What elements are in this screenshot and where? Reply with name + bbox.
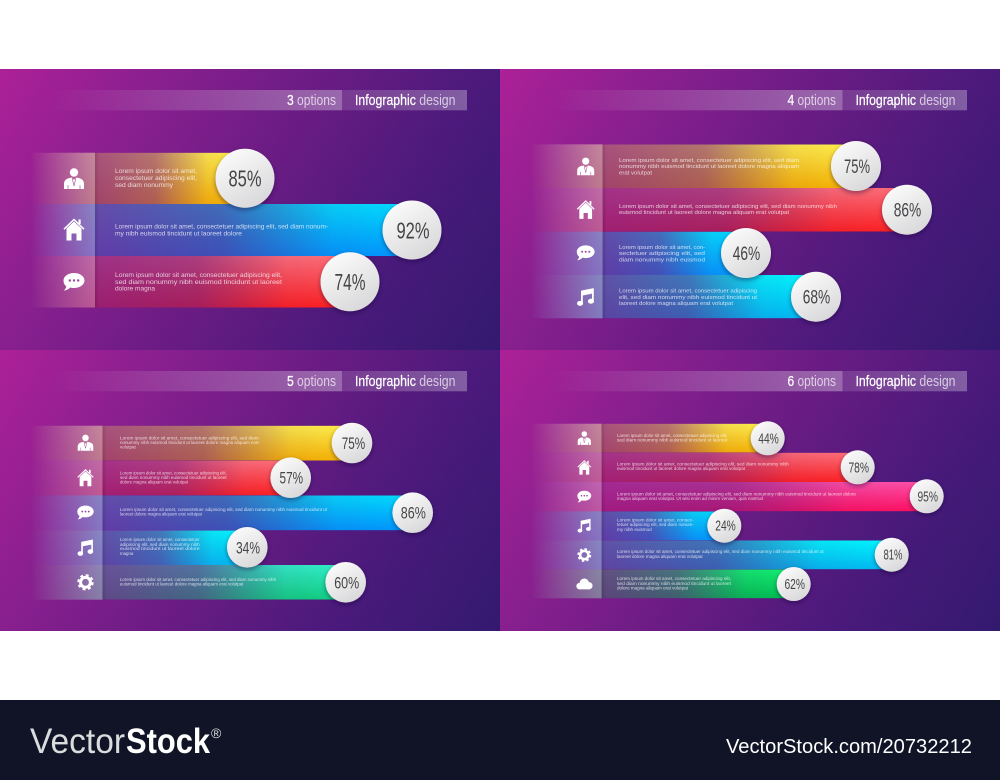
header: Infographic design: Infographic design (355, 92, 456, 109)
badge: 44%: 44% (758, 431, 779, 447)
badge: 75% (332, 423, 372, 463)
icon: person (578, 431, 591, 445)
icon: person (577, 158, 594, 175)
bar: red: euismod tincidunt ut laoreet dolore magna aliquam erat volutpat (619, 210, 790, 216)
header: 3 options: 3 options (287, 92, 336, 109)
footer logo: Stock (126, 722, 210, 761)
badge: 95% (910, 479, 944, 513)
bar: green: sed diam nonummy nibh euismod tincidunt ut laoreet (617, 581, 732, 586)
bar: red (95, 256, 350, 308)
icon: cloud (576, 579, 593, 589)
panel: 3 options (0, 69, 500, 350)
badge: 46%: 46% (733, 243, 760, 265)
icon: home (64, 220, 84, 240)
badge: 60%: 60% (334, 573, 359, 592)
bar: cyan: euismod tincidunt ut laoreet dolore (120, 546, 200, 551)
bar: yellow: Lorem ipsum dolor sit amet, consectetuer adipiscing elit, sed diam (120, 436, 259, 440)
bar: green: dolore magna aliquam erat volutpat (617, 586, 689, 590)
badge: 68%: 68% (803, 286, 830, 308)
icon: music (577, 288, 594, 306)
badge: 68% (791, 272, 841, 322)
bar: red: sed diam nonummy nibh euismod tincidunt ut laoreet (120, 475, 228, 480)
icon: chat (64, 273, 84, 291)
bar: cyan (603, 275, 816, 318)
header: 6 options: 6 options (788, 373, 836, 390)
bar: red: Lorem ipsum dolor sit amet, consectetuer adipiscing elit, (115, 272, 282, 279)
badge: 95%: 95% (917, 489, 938, 505)
badge: 74%: 74% (334, 269, 366, 295)
footer logo (30, 722, 210, 761)
bar: yellow: consectetuer adipiscing elit, (115, 175, 197, 182)
badge: 75% (831, 141, 881, 191)
icon: home (578, 461, 591, 475)
bar: yellow: volutpat (120, 444, 137, 450)
header: 4 options (550, 90, 842, 110)
header: 4 options: 4 options (788, 92, 836, 109)
bar: yellow: nonummy nibh euismod tincidunt ut laoreet dolore magna aliquam erat (120, 440, 260, 445)
bar: red: dolore magna aliquam erat volutpat (120, 480, 189, 484)
bar: pink: magna aliquam erat volutpat. Ut wisi enim ad minim veniam, quis nostrud (617, 496, 764, 501)
bar: blue: tetuer adipiscing elit, sed diam nonum- (617, 522, 694, 527)
bar: red: Lorem ipsum dolor sit amet, consectetuer adipiscing elit, sed diam nonummy nibh (619, 204, 837, 210)
header: 5 options: 5 options (287, 373, 336, 390)
bar: yellow (95, 153, 245, 204)
badge: 85% (216, 149, 274, 208)
footer band (0, 700, 1000, 780)
panel: 6 options (500, 350, 1000, 631)
header: 6 options (550, 371, 842, 391)
icon: chat (577, 491, 591, 502)
bar: cyan: laoreet dolore magna aliquam erat volutpat (617, 554, 704, 559)
bar: yellow: nonummy nibh euismod tincidunt ut laoreet dolore magna aliquam (619, 164, 800, 170)
bar: yellow: sed diam nonummy nibh euismod tincidunt ut laoreet (617, 438, 728, 442)
bar: yellow: erat volutpat (619, 171, 653, 177)
bar: cyan: Lorem ipsum dolor sit amet, consectetuer adipiscing elit, sed diam nonummy nibh euismod tincidunt ut (617, 549, 825, 554)
icon strip (30, 426, 106, 600)
badge: 24% (707, 509, 741, 543)
icon strip (30, 153, 99, 308)
header: Infographic design: Infographic design (856, 92, 956, 109)
badge: 62% (777, 567, 811, 601)
bar: red: euismod tincidunt ut laoreet dolore magna aliquam erat volutpat (617, 466, 746, 471)
bar: blue (102, 495, 412, 530)
bar: blue: Lorem ipsum dolor sit amet, con- (619, 245, 705, 251)
badge: 44% (751, 421, 785, 455)
badge: 75%: 75% (844, 156, 870, 178)
icon: gear (78, 575, 93, 589)
icon: gear (578, 549, 590, 561)
bar: yellow (602, 424, 768, 453)
header: 3 options (50, 90, 342, 110)
header: Infographic design: Infographic design (355, 373, 456, 390)
icon: music (78, 540, 93, 556)
badge: 86%: 86% (894, 200, 921, 222)
bar: blue: sectetuer adipiscing elit, sed (619, 251, 705, 257)
bar: yellow: sed diam nonummy (115, 182, 174, 189)
bar: blue: my nibh euismod tincidunt ut laoreet dolore (115, 230, 243, 238)
icon: person (78, 435, 93, 451)
footer logo: Vector (30, 722, 125, 761)
bar: blue (95, 204, 412, 256)
bar: blue (602, 511, 724, 540)
icon: person (64, 168, 84, 189)
bar: red: dolore magna (115, 286, 156, 293)
badge: 74% (320, 252, 380, 311)
registered mark: ® (211, 725, 222, 741)
badge: 78% (841, 450, 875, 484)
icon strip (530, 144, 607, 318)
icon: music (578, 519, 591, 533)
icon: home (78, 470, 93, 486)
bar: cyan: elit, sed diam nonummy nibh euismod tincidunt ut (619, 295, 758, 301)
bar: pink (602, 482, 927, 511)
bar: cyan (602, 540, 892, 569)
bar: red: sed diam nonummy nibh euismod tincidunt ut laoreet (115, 279, 282, 286)
bar: cyan: magna (120, 551, 134, 556)
badge: 62%: 62% (784, 577, 805, 593)
panel: 4 options (500, 69, 1000, 350)
footer image id: VectorStock.com/20732212 (726, 736, 972, 758)
bar: cyan (102, 530, 248, 565)
bar: yellow: Lorem ipsum dolor sit amet, consectetuer adipiscing elit, (617, 433, 727, 438)
badge: 60% (325, 562, 366, 603)
bar: red (602, 453, 858, 482)
badge: 85%: 85% (228, 166, 262, 192)
bar: red (102, 461, 290, 495)
icon: home (577, 201, 594, 219)
bar: green (602, 569, 794, 598)
badge: 78%: 78% (848, 460, 869, 476)
bar: yellow (603, 144, 856, 188)
icon strip (530, 424, 606, 598)
bar: pink: Lorem ipsum dolor sit amet, consectetuer adipiscing elit, sed diam nonummy nibh euismod tincidunt ut laoreet dolore (617, 492, 857, 496)
bar: cyan: Lorem ipsum dolor sit amet, consectetuer adipiscing (619, 289, 757, 295)
badge: 92% (382, 200, 442, 260)
bar: green: Lorem ipsum dolor sit amet, consectetuer adipiscing elit, (617, 576, 731, 581)
bar: blue: laoreet dolore magna aliquam erat volutpat (120, 512, 203, 516)
bar: yellow (102, 426, 352, 461)
icon: chat (77, 506, 94, 519)
badge: 86% (392, 492, 433, 533)
badge: 57%: 57% (280, 469, 303, 488)
bar: teal: Lorem ipsum dolor sit amet, consectetuer adipiscing elit, sed diam nonummy nibh (120, 577, 277, 582)
badge: 81% (875, 538, 909, 572)
bar: blue: Lorem ipsum dolor sit amet, consectetuer adipiscing elit, sed diam nonum- (115, 224, 328, 230)
bar: blue: my nibh euismod (617, 527, 652, 532)
badge: 86%: 86% (401, 504, 426, 523)
bar: cyan: Lorem ipsum dolor sit amet, consectetuer (120, 537, 200, 542)
bar: blue: Lorem ipsum dolor sit amet, consectetuer adipiscing elit, sed diam nonummy nibh euismod tincidunt ut (120, 507, 328, 512)
bar: red: Lorem ipsum dolor sit amet, consectetuer adipiscing elit, (120, 470, 227, 476)
badge: 24%: 24% (715, 519, 736, 535)
bar: yellow: Lorem ipsum dolor sit amet, consectetuer adipiscing elit, sed diam (619, 158, 800, 164)
bar: teal (102, 565, 346, 600)
bar: blue: diam nonummy nibh euismod (619, 258, 705, 264)
panel: 5 options (0, 350, 500, 631)
bar: teal: euismod tincidunt ut laoreet dolore magna aliquam erat volutpat (120, 582, 244, 586)
badge: 81%: 81% (884, 548, 903, 564)
badge: 92%: 92% (396, 218, 430, 244)
icon: chat (577, 245, 595, 260)
badge: 34%: 34% (236, 538, 260, 557)
bar: red (603, 188, 907, 232)
badge: 75%: 75% (342, 434, 365, 453)
header: Infographic design: Infographic design (856, 373, 956, 390)
bar: blue (603, 232, 746, 275)
badge: 34% (227, 527, 268, 568)
header: 5 options (50, 371, 342, 391)
bar: yellow: Lorem ipsum dolor sit amet, (115, 168, 197, 175)
bar: red: Lorem ipsum dolor sit amet, consectetuer adipiscing elit, sed diam nonummy nibh (617, 462, 789, 466)
bar: cyan: adipiscing elit, sed diam nonummy nibh (120, 542, 200, 547)
badge: 86% (882, 185, 932, 235)
badge: 46% (721, 228, 771, 278)
bar: blue: Lorem ipsum dolor sit amet, consec- (617, 518, 694, 522)
badge: 57% (270, 457, 311, 498)
bar: cyan: laoreet dolore magna aliquam erat volutpat (619, 301, 734, 307)
